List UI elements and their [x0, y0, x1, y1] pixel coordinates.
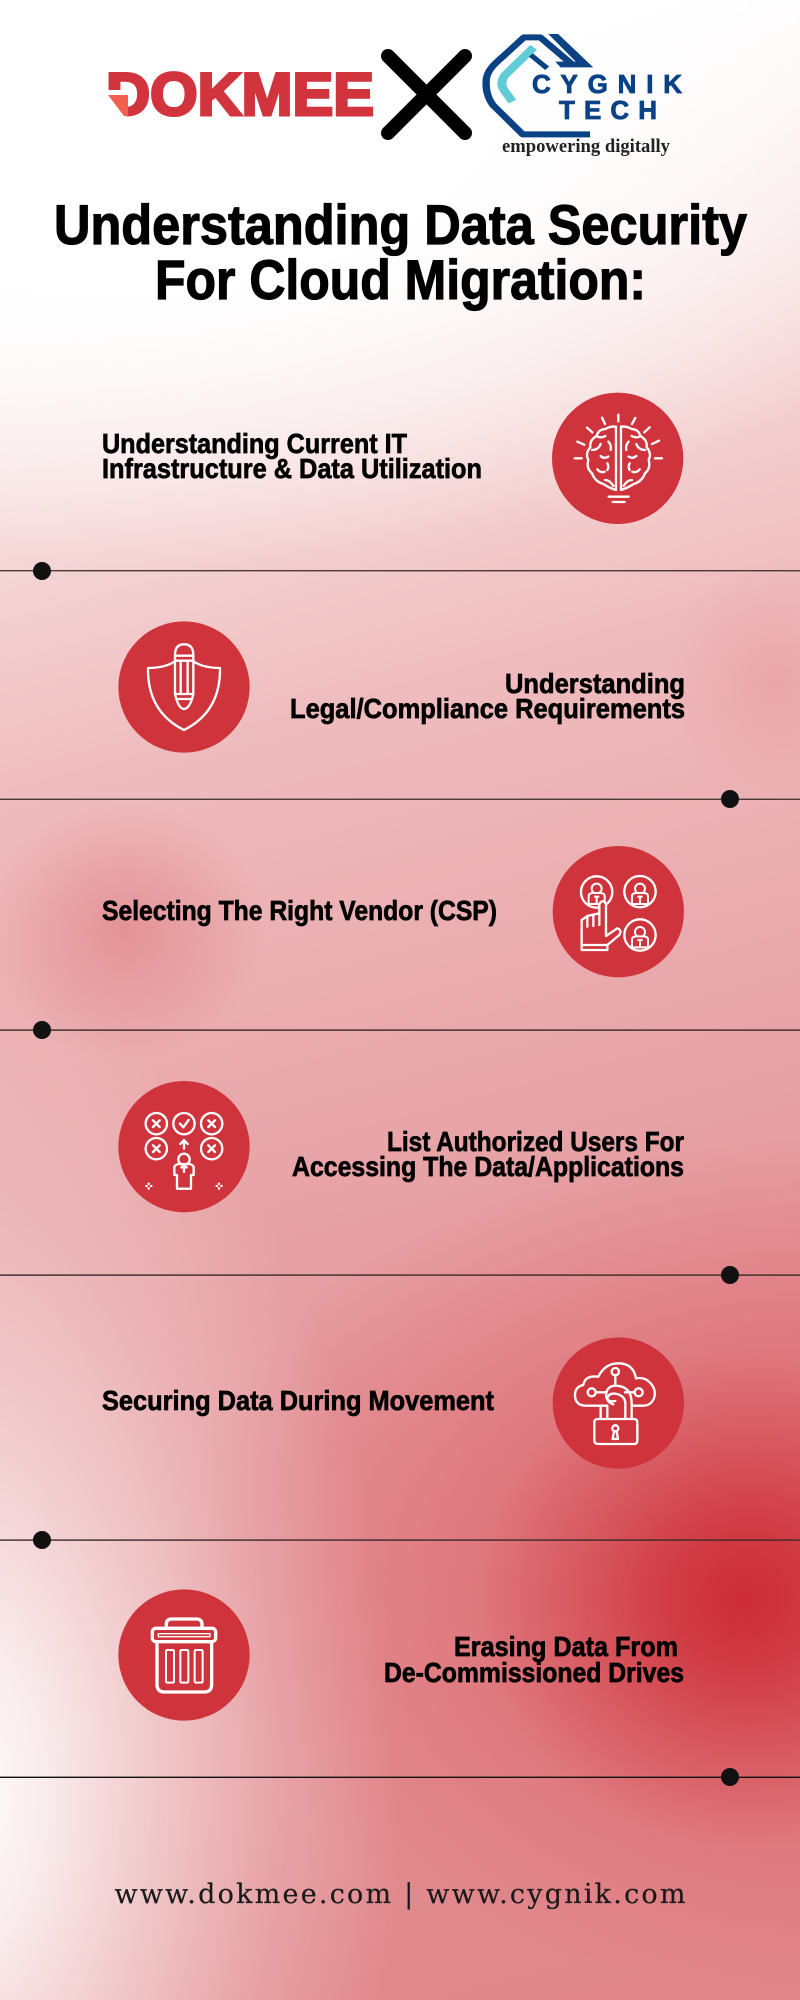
- logo: Dokmee: DOKMEE: [106, 61, 374, 128]
- step 4 text: Accessing The Data/Applications: [292, 1151, 684, 1182]
- step 1 text: Understanding Current IT: [102, 428, 407, 459]
- footer URLs: www.dokmee.com | www.cygnik.com: [114, 1879, 686, 1910]
- divider line 5 with dot: [0, 1531, 800, 1549]
- step 1 text: Infrastructure & Data Utilization: [102, 453, 482, 484]
- icon: trash can: [118, 1589, 250, 1721]
- divider line 3 with dot: [0, 1021, 800, 1039]
- step 2 text: [290, 668, 685, 724]
- step 2 text: Understanding: [505, 668, 685, 699]
- icon: cloud with padlock: [553, 1337, 684, 1469]
- icon: X separator: [388, 56, 465, 133]
- logo: Cygnik Tech: CYGNIK: [532, 69, 682, 99]
- step 4 text: [292, 1126, 684, 1182]
- title: For Cloud Migration:: [155, 248, 646, 311]
- step 2 text: Legal/Compliance Requirements: [290, 693, 685, 724]
- divider line 6 with dot: [0, 1768, 800, 1786]
- logo: Cygnik Tech: empowering digitally: [502, 136, 670, 157]
- step 6 text: De-Commissioned Drives: [384, 1657, 684, 1688]
- logo: Cygnik Tech: [486, 34, 682, 157]
- step 6 text: Erasing Data From: [454, 1631, 678, 1662]
- step 6 text: [384, 1631, 684, 1688]
- icon: authorized user checks: [118, 1081, 250, 1212]
- step 5 text: Securing Data During Movement: [102, 1385, 494, 1416]
- step 1 text: [102, 428, 482, 484]
- title: Understanding Data Security: [54, 193, 747, 256]
- icon: brain with light rays: [552, 393, 683, 524]
- title: [54, 193, 747, 311]
- icon: shield with pencil: [118, 621, 250, 753]
- step 3 text: Selecting The Right Vendor (CSP): [102, 895, 497, 926]
- divider line 1 with dot: [0, 562, 800, 580]
- logo: Cygnik Tech: TECH: [559, 95, 657, 125]
- step 4 text: List Authorized Users For: [387, 1126, 684, 1157]
- divider line 2 with dot: [0, 790, 800, 808]
- icon: hand selecting user: [553, 846, 684, 977]
- divider line 4 with dot: [0, 1266, 800, 1284]
